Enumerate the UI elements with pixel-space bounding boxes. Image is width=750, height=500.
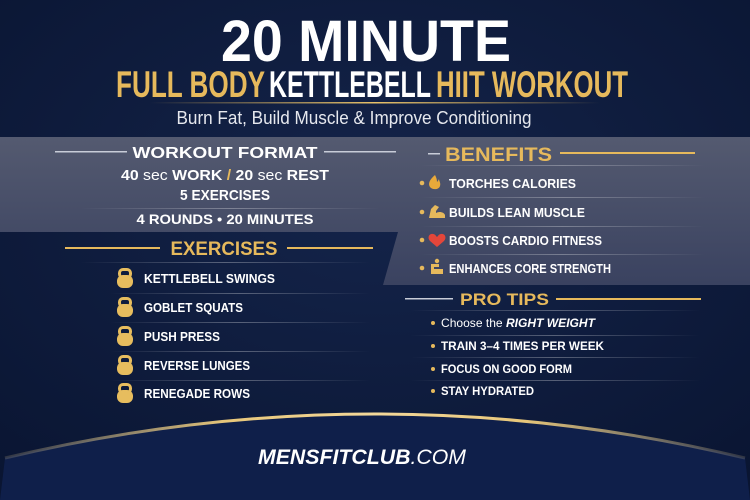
subtitle headline: HIIT WORKOUT [436, 64, 628, 105]
panel: workout format: WORKOUT FORMAT [132, 145, 318, 162]
panel: pro tips: Choose the RIGHT WEIGHT [441, 316, 597, 330]
panel: exercises [65, 239, 373, 403]
panel: workout format: 4 ROUNDS • 20 MINUTES [136, 211, 314, 227]
footer arc [0, 414, 750, 500]
tagline: Burn Fat, Build Muscle & Improve Conditioning [176, 108, 532, 128]
panel: benefits: BOOSTS CARDIO FITNESS [449, 233, 602, 248]
panel: exercises: KETTLEBELL SWINGS [144, 271, 275, 286]
panel: pro tips: PRO TIPS [460, 290, 549, 309]
panel: pro tips: FOCUS ON GOOD FORM [441, 362, 572, 376]
panel: benefits [420, 145, 705, 276]
title: 20 MINUTE [221, 9, 511, 74]
panel: exercises: PUSH PRESS [144, 329, 220, 344]
panel: workout format: 40 sec WORK / 20 sec REST [121, 167, 329, 184]
panel: benefits: TORCHES CALORIES [449, 176, 576, 191]
footer website: MENSFITCLUB.COM [258, 446, 467, 469]
background band [0, 137, 750, 285]
panel: workout format [55, 145, 396, 227]
subtitle headline: FULL BODY [116, 64, 265, 105]
panel: exercises: REVERSE LUNGES [144, 358, 250, 373]
subtitle headline [116, 64, 628, 105]
panel: exercises: EXERCISES [170, 239, 278, 260]
panel: pro tips [405, 290, 701, 398]
panel: benefits: ENHANCES CORE STRENGTH [449, 261, 611, 276]
panel: exercises: RENEGADE ROWS [144, 386, 250, 401]
panel: workout format: 5 EXERCISES [180, 187, 270, 204]
panel: exercises: GOBLET SQUATS [144, 300, 243, 315]
panel: benefits: BUILDS LEAN MUSCLE [449, 205, 585, 220]
panel: pro tips: TRAIN 3–4 TIMES PER WEEK [441, 339, 604, 353]
panel: benefits: BENEFITS [445, 145, 552, 166]
panel: pro tips: STAY HYDRATED [441, 384, 534, 398]
subtitle headline: KETTLEBELL [269, 64, 431, 105]
